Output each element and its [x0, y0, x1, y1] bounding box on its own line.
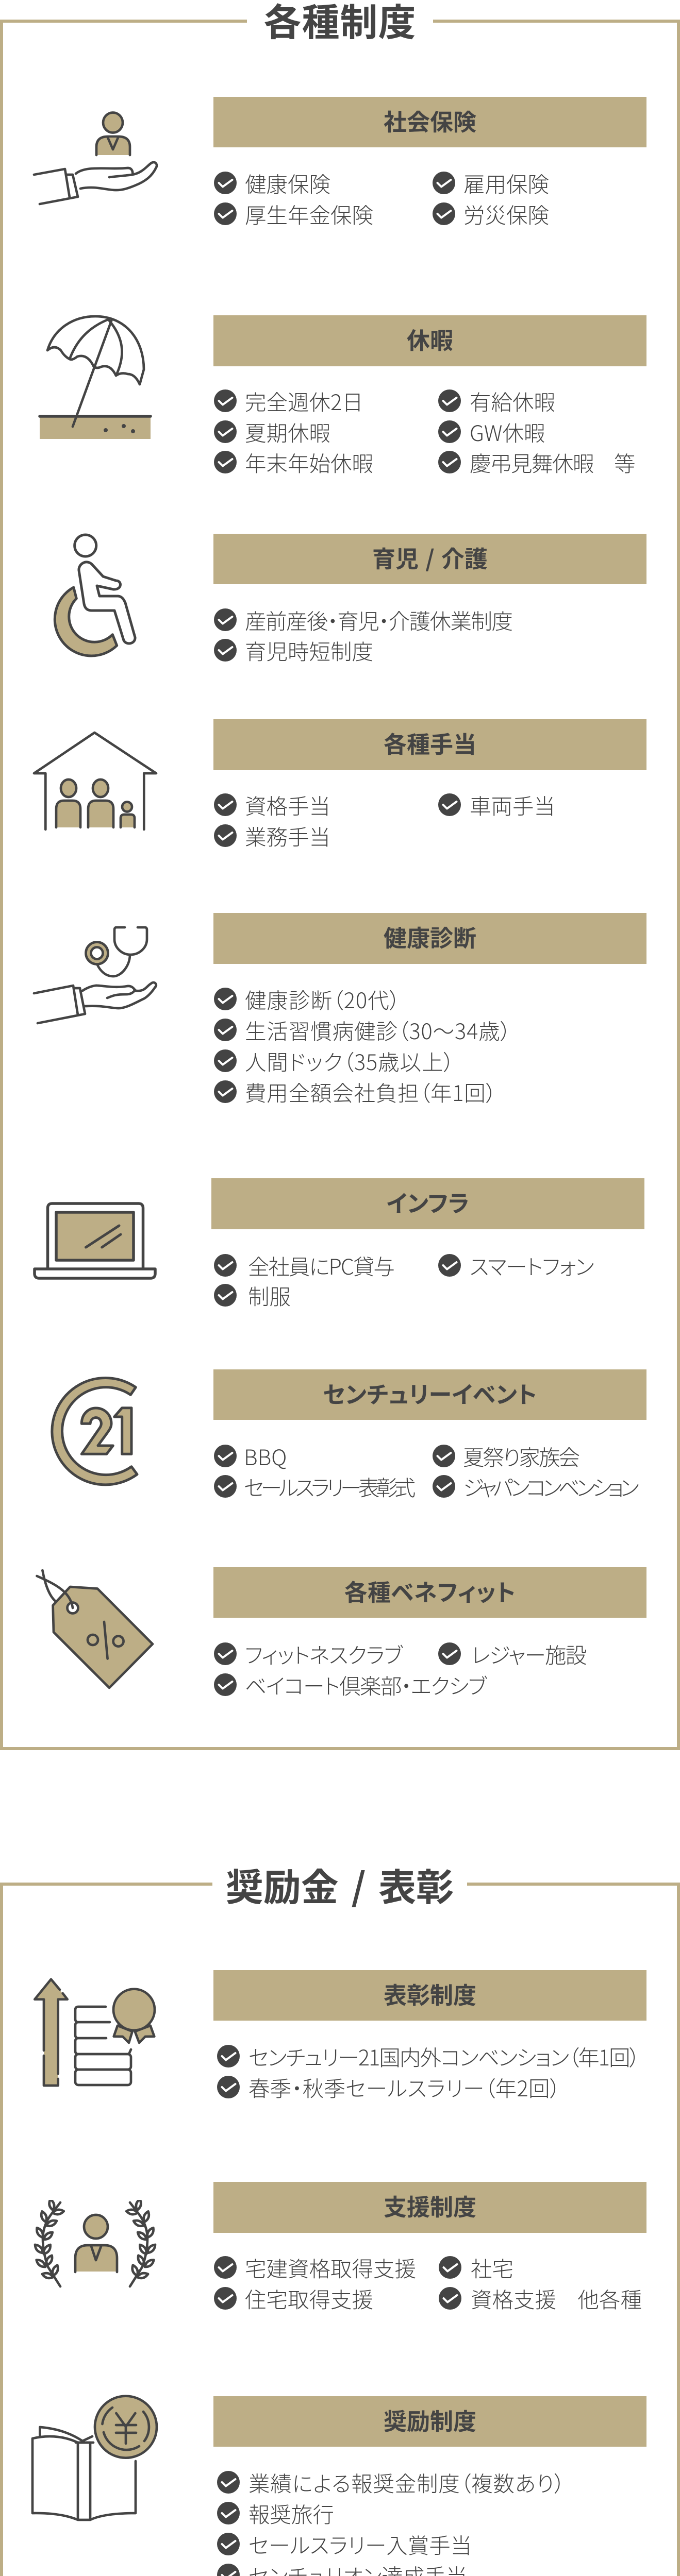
- section row: センチュリーイベント: [51, 1369, 646, 1502]
- section row: 健康診断: [33, 913, 646, 1107]
- item: スマートフォン: スマートフォン: [470, 1250, 593, 1281]
- item: 労災保険: 労災保険: [463, 198, 549, 229]
- icon: arrow, coins and medal: [31, 1976, 160, 2089]
- icon: beach umbrella: [38, 315, 152, 439]
- banner: 健康診断: 健康診断: [384, 920, 476, 953]
- item: 年末年始休暇: 年末年始休暇: [245, 447, 373, 478]
- item: レジャー施設: レジャー施設: [471, 1638, 586, 1669]
- title: 奨励金 / 表彰: [212, 1865, 467, 1906]
- item: 人間ドック（35歳以上）: 人間ドック（35歳以上）: [245, 1045, 455, 1076]
- banner: 社会保険: [213, 97, 646, 147]
- banner: 育児 / 介護: [213, 534, 646, 584]
- icon: hand holding person: [33, 111, 158, 205]
- item: 健康保険: 健康保険: [245, 167, 330, 198]
- banner: 支援制度: 支援制度: [384, 2189, 476, 2222]
- banner: センチュリーイベント: [213, 1369, 646, 1420]
- item: セールスラリー表彰式: セールスラリー表彰式: [244, 1471, 412, 1502]
- item: 住宅取得支援: 住宅取得支援: [245, 2283, 373, 2314]
- banner: 奨励制度: 奨励制度: [384, 2403, 476, 2436]
- banner: 各種ベネフィット: 各種ベネフィット: [344, 1574, 516, 1607]
- icon: laptop: [33, 1202, 157, 1280]
- item: センチュリー21国内外コンベンション（年1回）: センチュリー21国内外コンベンション（年1回）: [248, 2041, 639, 2072]
- item: BBQ: BBQ: [244, 1440, 287, 1471]
- banner: センチュリーイベント: センチュリーイベント: [323, 1376, 537, 1410]
- item: 業務手当: 業務手当: [245, 820, 330, 851]
- banner: 健康診断: [213, 913, 646, 964]
- item: 社宅: [439, 2252, 513, 2283]
- section row: 奨励制度: [31, 2391, 650, 2576]
- panel: 各種制度: [0, 0, 680, 1750]
- section row: 社会保険: [33, 97, 646, 229]
- item: 健康診断（20代）: 健康診断（20代）: [245, 984, 401, 1014]
- item: 有給休暇: 有給休暇: [470, 385, 555, 416]
- item: GW休暇: GW休暇: [470, 416, 545, 447]
- section row: インフラ: [33, 1178, 644, 1311]
- section row: 表彰制度: [31, 1970, 650, 2103]
- item: 宅建資格取得支援: 宅建資格取得支援: [245, 2252, 416, 2283]
- icon: book and yen coin: [31, 2393, 160, 2524]
- item: 社宅: 社宅: [471, 2252, 513, 2283]
- item: 夏祭り家族会: 夏祭り家族会: [463, 1440, 578, 1471]
- panel: 奨励金 / 表彰: [0, 1865, 680, 2576]
- banner: 休暇: 休暇: [407, 322, 453, 355]
- icon: person with laurels: [31, 2200, 160, 2290]
- item: 資格手当: 資格手当: [245, 789, 330, 820]
- banner: 各種ベネフィット: [213, 1567, 646, 1618]
- item: 全社員にPC貸与: 全社員にPC貸与: [248, 1250, 394, 1281]
- section row: 各種ベネフィット: [31, 1567, 650, 1700]
- banner: 表彰制度: [213, 1970, 646, 2021]
- icon: price tag: [31, 1566, 160, 1692]
- item: 制服: [214, 1280, 291, 1311]
- item: 完全週休2日: 完全週休2日: [245, 385, 363, 416]
- banner: 各種手当: [213, 719, 646, 770]
- item: 費用全額会社負担（年1回）: 費用全額会社負担（年1回）: [245, 1076, 497, 1107]
- item: 夏期休暇: 夏期休暇: [245, 416, 330, 447]
- item: 生活習慣病健診（30〜34歳）: 生活習慣病健診（30〜34歳）: [245, 1014, 511, 1045]
- banner: 支援制度: [213, 2182, 646, 2233]
- item: 育児時短制度: 育児時短制度: [245, 635, 373, 666]
- item: セールスラリー入賞手当: セールスラリー入賞手当: [248, 2529, 472, 2560]
- item: 慶弔見舞休暇 等: 慶弔見舞休暇 等: [470, 447, 635, 478]
- banner: 育児 / 介護: 育児 / 介護: [372, 540, 488, 574]
- banner: 休暇: [213, 315, 646, 366]
- icon: hand with stethoscope: [33, 926, 158, 1024]
- item: ベイコート倶楽部・エクシブ: ベイコート倶楽部・エクシブ: [245, 1669, 486, 1700]
- section row: 支援制度: [31, 2182, 650, 2314]
- banner: 各種手当: 各種手当: [384, 726, 476, 759]
- item: 制服: 制服: [248, 1280, 291, 1311]
- banner: インフラ: インフラ: [387, 1185, 469, 1218]
- section row: 育児 / 介護: [54, 534, 646, 666]
- item: BBQ: [214, 1440, 287, 1471]
- icon: family in house: [33, 732, 158, 831]
- section row: 各種手当: [33, 719, 646, 851]
- item: ジャパンコンベンション: ジャパンコンベンション: [463, 1471, 636, 1502]
- item: 報奨旅行: 報奨旅行: [248, 2498, 334, 2529]
- banner: 社会保険: 社会保険: [384, 104, 476, 137]
- item: 車両手当: 車両手当: [470, 789, 555, 820]
- banner: 奨励制度: [213, 2396, 646, 2447]
- title: 奨励金 / 表彰: 奨励金 / 表彰: [226, 1857, 454, 1912]
- banner: 表彰制度: 表彰制度: [384, 1977, 476, 2010]
- item: 業績による報奨金制度（複数あり）: 業績による報奨金制度（複数あり）: [248, 2467, 566, 2498]
- icon: C21 logo: [51, 1377, 138, 1486]
- item: 厚生年金保険: 厚生年金保険: [245, 198, 373, 229]
- icon: wheelchair: [54, 534, 137, 657]
- banner: インフラ: [211, 1178, 644, 1229]
- item: 春季・秋季セールスラリー（年2回）: 春季・秋季セールスラリー（年2回）: [248, 2071, 561, 2102]
- item: フィットネスクラブ: フィットネスクラブ: [245, 1638, 402, 1669]
- item: 産前産後・育児・介護休業制度: 産前産後・育児・介護休業制度: [245, 604, 512, 635]
- item: 雇用保険: 雇用保険: [463, 167, 549, 198]
- item: 資格支援 他各種: 資格支援 他各種: [471, 2283, 642, 2314]
- section row: 休暇: [38, 315, 646, 478]
